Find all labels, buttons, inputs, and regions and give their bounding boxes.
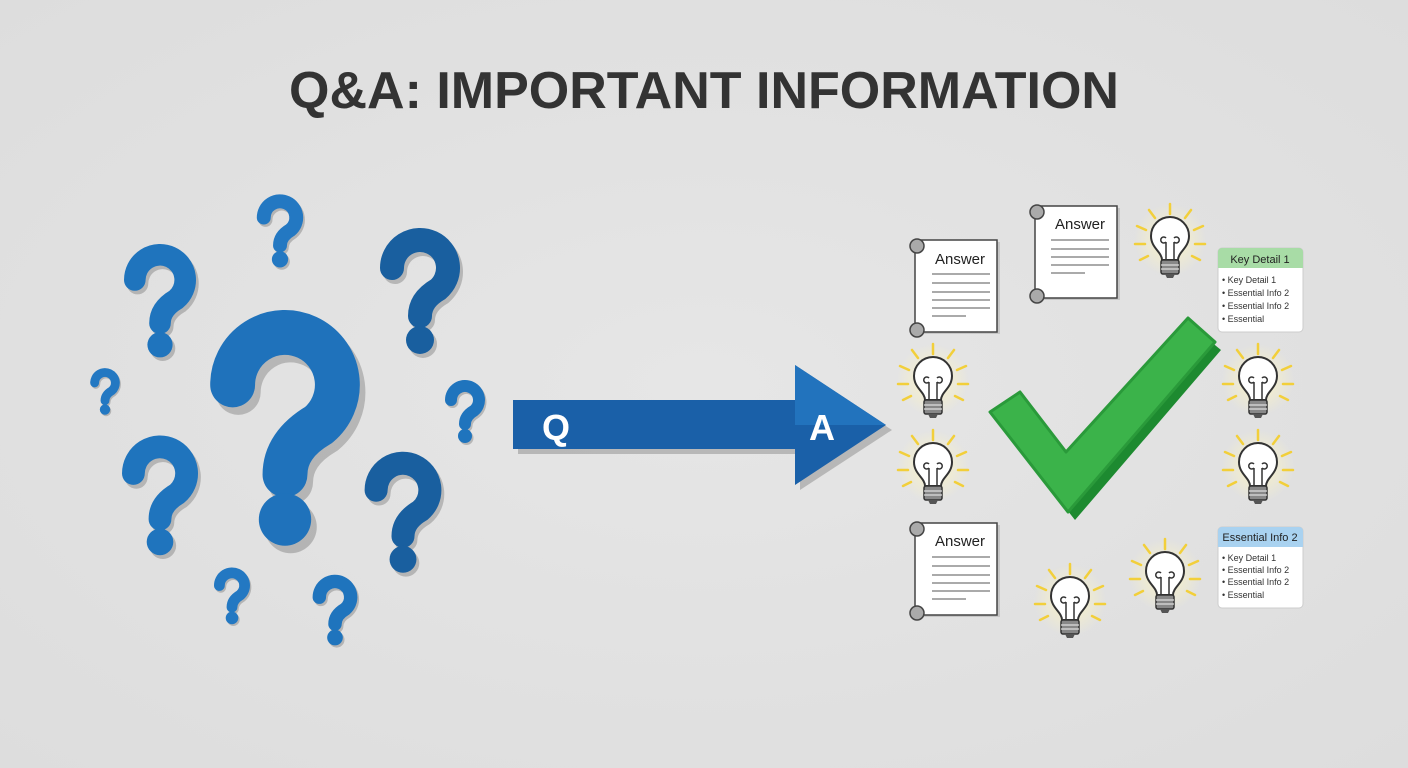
card: key detail 1: Key Detail 1	[1230, 254, 1290, 266]
answer scroll 1: Answer	[935, 251, 985, 268]
answer scroll 2: Answer	[1055, 216, 1105, 233]
arrow Q to A: A	[809, 407, 835, 448]
answer scroll 2	[1030, 205, 1120, 303]
card: essential info 2: Essential Info 2	[1222, 532, 1298, 544]
card: essential info 2: • Key Detail 1	[1222, 553, 1276, 563]
card: key detail 1: • Essential Info 2	[1222, 301, 1289, 311]
answer scroll 3	[910, 522, 1000, 620]
arrow Q to A: Q	[542, 407, 570, 448]
card: essential info 2: • Essential Info 2	[1222, 577, 1289, 587]
card: essential info 2: • Essential	[1222, 590, 1264, 600]
arrow Q to A	[513, 365, 892, 490]
card: essential info 2: • Essential Info 2	[1222, 565, 1289, 575]
card: essential info 2	[1218, 527, 1303, 608]
answer scroll 1	[910, 239, 1000, 337]
question marks cluster	[95, 201, 480, 648]
card: key detail 1: • Essential Info 2	[1222, 288, 1289, 298]
card: key detail 1	[1218, 248, 1303, 332]
green checkmark	[990, 318, 1221, 520]
card: key detail 1: • Essential	[1222, 314, 1264, 324]
card: key detail 1: • Key Detail 1	[1222, 275, 1276, 285]
answer scroll 3: Answer	[935, 533, 985, 550]
lightbulbs	[897, 204, 1294, 638]
title: Q&A: IMPORTANT INFORMATION	[289, 62, 1119, 120]
